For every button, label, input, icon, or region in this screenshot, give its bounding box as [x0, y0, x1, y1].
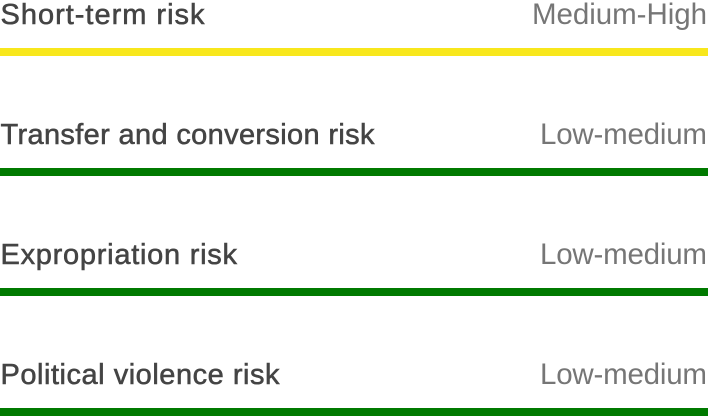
label: political violence risk: Political violence risk — [0, 359, 280, 391]
green rating bar — [0, 408, 708, 416]
green rating bar — [0, 288, 708, 296]
rating: low-medium: Low-medium — [540, 238, 707, 271]
yellow rating bar — [0, 48, 708, 56]
label: transfer and conversion risk: Transfer and conversion risk — [0, 119, 375, 151]
green rating bar — [0, 168, 708, 176]
row: political violence risk — [0, 358, 708, 416]
rating: low-medium: Low-medium — [540, 118, 707, 151]
label: expropriation risk: Expropriation risk — [0, 239, 238, 271]
row: short-term risk — [0, 0, 708, 56]
row: transfer and conversion risk — [0, 118, 708, 176]
row: expropriation risk — [0, 238, 708, 296]
rating: low-medium: Low-medium — [540, 358, 707, 391]
